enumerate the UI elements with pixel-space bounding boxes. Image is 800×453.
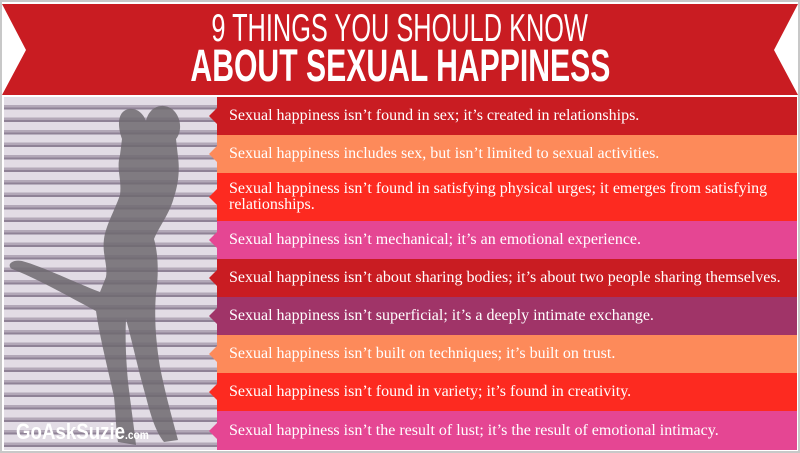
- row 6: Sexual happiness isn’t superficial; it’s a deeply intimate exchange.: [229, 307, 654, 324]
- row 2: [217, 135, 797, 173]
- row 8: [217, 373, 797, 411]
- title line 2: ABOUT SEXUAL HAPPINESS: [190, 40, 610, 91]
- row 5: [217, 259, 797, 297]
- image: couple silhouette behind blinds: [4, 97, 217, 450]
- row 3: Sexual happiness isn’t found in satisfying physical urges; it emerges from satisfying relationships.: [229, 180, 767, 213]
- row 8: Sexual happiness isn’t found in variety; it’s found in creativity.: [229, 383, 631, 400]
- row 5: Sexual happiness isn’t about sharing bodies; it’s about two people sharing themselves.: [229, 269, 781, 286]
- logo: GoAskSuzie.com: [16, 421, 149, 444]
- row 7: [217, 335, 797, 373]
- row 3: [217, 173, 797, 221]
- row 1: Sexual happiness isn’t found in sex; it’s created in relationships.: [229, 107, 639, 124]
- title line 1: 9 THINGS YOU SHOULD KNOW: [212, 7, 588, 50]
- row 2: Sexual happiness includes sex, but isn’t limited to sexual activities.: [229, 145, 659, 162]
- row 9: [217, 411, 797, 450]
- row 6: [217, 297, 797, 335]
- banner: [2, 4, 798, 95]
- row 1: [217, 97, 797, 135]
- row 7: Sexual happiness isn’t built on techniques; it’s built on trust.: [229, 345, 615, 362]
- row 4: Sexual happiness isn’t mechanical; it’s an emotional experience.: [229, 231, 641, 248]
- row 4: [217, 221, 797, 259]
- row 9: Sexual happiness isn’t the result of lust; it’s the result of emotional intimacy.: [229, 422, 719, 438]
